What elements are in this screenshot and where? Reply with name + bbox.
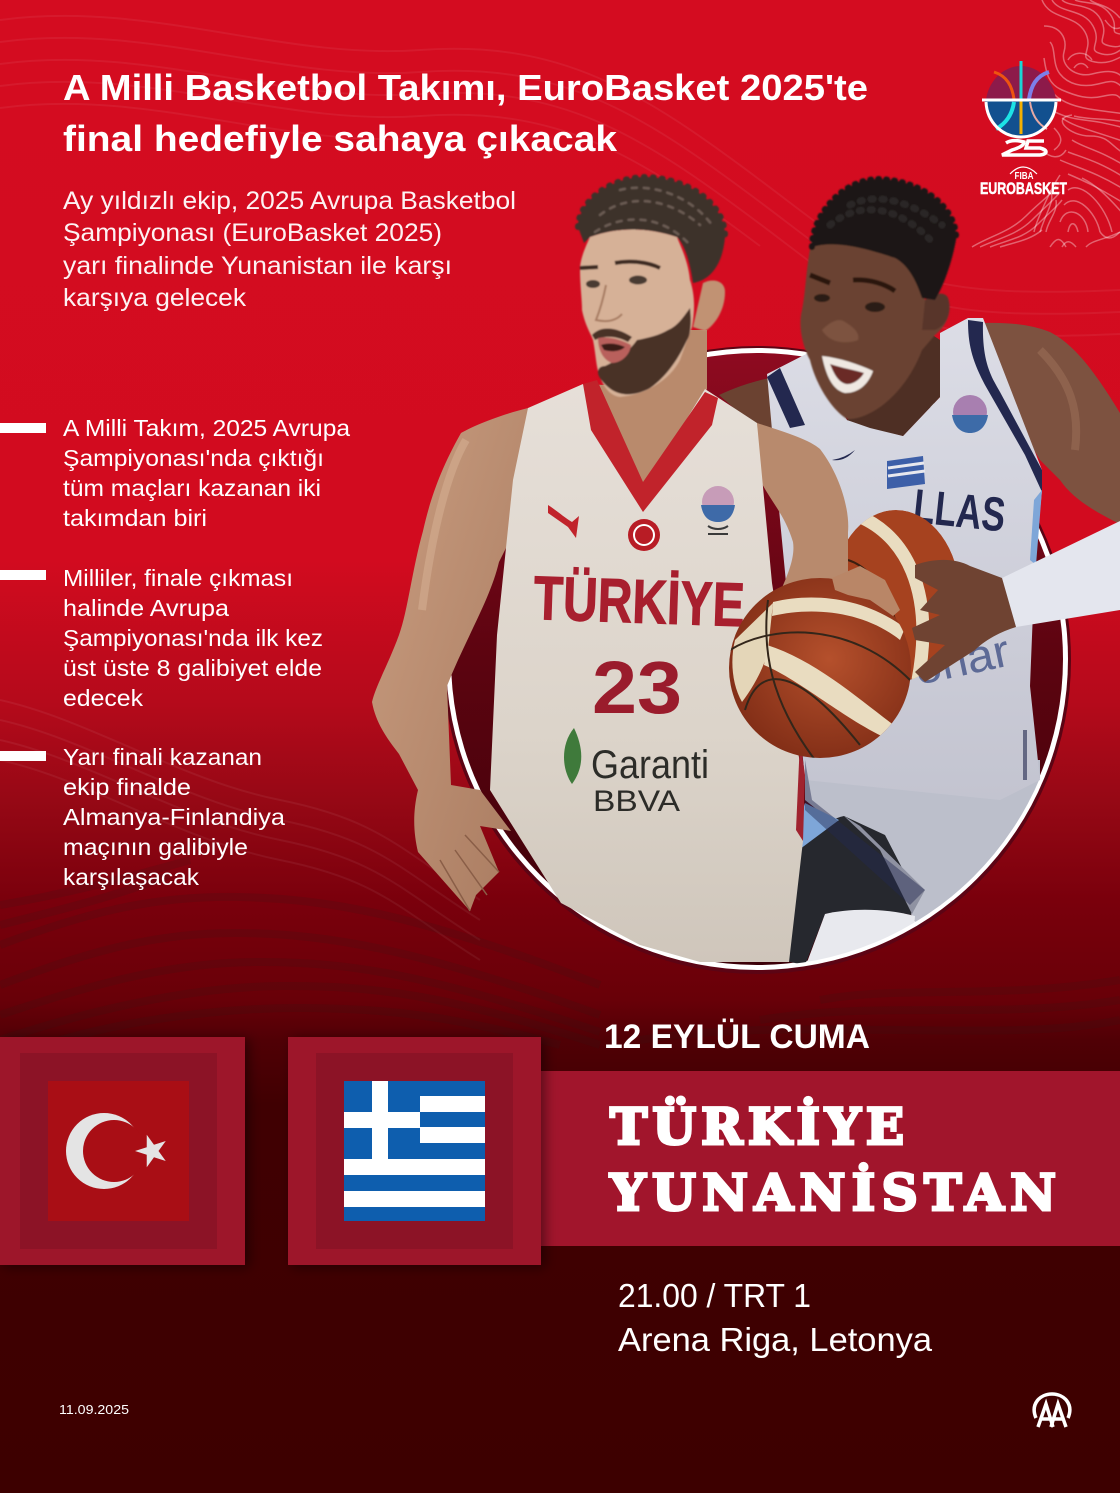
match info: 21.00 / TRT 1: [618, 1277, 811, 1314]
Greek head: [800, 179, 956, 419]
decorative lower bands: [0, 860, 1120, 1045]
icon: EuroBasket logo: EUROBASKET: [980, 179, 1067, 198]
player: Türkiye: BBVA: [593, 785, 680, 818]
panel: match band: [541, 1018, 1120, 1246]
title: A Milli Basketbol Takımı, EuroBasket 2025'te: [63, 67, 868, 108]
left arm and hand: [372, 408, 530, 911]
icon: EuroBasket logo: [980, 61, 1067, 198]
basketball: front: [729, 578, 911, 760]
bullet 2: Şampiyonası'nda ilk kez: [63, 625, 323, 651]
icon: EuroBasket logo: FIBA: [1014, 171, 1034, 182]
flag panel: Yunanistan: [288, 1037, 541, 1265]
bullet 3: Yarı finali kazanan: [63, 744, 262, 770]
player: Türkiye: 23: [592, 646, 682, 729]
bullet 1: tüm maçları kazanan iki: [63, 475, 321, 501]
team names: [609, 1096, 1056, 1222]
bullet 3: ekip finalde: [63, 774, 191, 800]
hand: Türkiye on ball: [832, 566, 900, 616]
bullet 3: [0, 744, 285, 890]
team names: TÜRKİYE: [610, 1096, 904, 1156]
neck: [583, 330, 707, 490]
jersey marks: [953, 395, 987, 429]
title: [63, 67, 868, 159]
bullet 1: takımdan biri: [63, 505, 207, 531]
player: Türkiye: [372, 177, 848, 962]
publication date: 11.09.2025: [59, 1402, 129, 1417]
bullet 3: karşılaşacak: [63, 864, 200, 890]
Greek shorts and knee: [780, 759, 1040, 975]
circle frame: [443, 346, 1071, 974]
bullet 2: [0, 565, 323, 711]
subtitle: karşıya gelecek: [63, 284, 247, 312]
subtitle: [63, 187, 516, 312]
bullet 2: halinde Avrupa: [63, 595, 229, 621]
icon: AA logo: [1034, 1394, 1070, 1427]
title: final hedefiyle sahaya çıkacak: [63, 118, 618, 159]
basketball: back: [848, 510, 954, 680]
Greek neck: [847, 330, 940, 436]
subtitle: yarı finalinde Yunanistan ile karşı: [63, 252, 452, 280]
Greek right arm: [983, 323, 1120, 524]
bullet 1: A Milli Takım, 2025 Avrupa: [63, 415, 350, 441]
bullet 2: üst üste 8 galibiyet elde: [63, 655, 322, 681]
right arm: [757, 423, 848, 590]
player: Greece: LLAS: [911, 480, 1008, 543]
match info: Arena Riga, Letonya: [618, 1321, 933, 1358]
subtitle: Şampiyonası (EuroBasket 2025): [63, 219, 442, 247]
fingerprint pattern top right: [972, 0, 1120, 247]
bullet 2: Milliler, finale çıkması: [63, 565, 293, 591]
photo: players in circle: [372, 177, 1120, 975]
Greek jersey: [767, 318, 1042, 800]
player: Greece: onar: [909, 624, 1014, 695]
jersey: [490, 384, 803, 962]
subtitle: Ay yıldızlı ekip, 2025 Avrupa Basketbol: [63, 187, 516, 215]
bullet 3: Almanya-Finlandiya: [63, 804, 285, 830]
date: 12 EYLÜL CUMA: [604, 1018, 870, 1056]
jersey marks: [548, 505, 579, 538]
player: Türkiye: Garanti: [591, 743, 709, 787]
bullet 1: Şampiyonası'nda çıktığı: [63, 445, 324, 471]
bullet 3: maçının galibiyle: [63, 834, 248, 860]
team names: YUNANİSTAN: [609, 1162, 1056, 1222]
bullet 2: edecek: [63, 685, 144, 711]
Greek left arm: [719, 378, 800, 440]
player: Greece: [719, 179, 1120, 975]
flag panel: Türkiye: [0, 1037, 245, 1265]
bullet 1: [0, 415, 350, 531]
player: Türkiye: TÜRKİYE: [533, 564, 746, 640]
decorative wave lines: [0, 16, 1120, 960]
hand: Greece: [912, 521, 1120, 682]
match info: [618, 1277, 933, 1358]
Turkish head: [578, 177, 725, 397]
